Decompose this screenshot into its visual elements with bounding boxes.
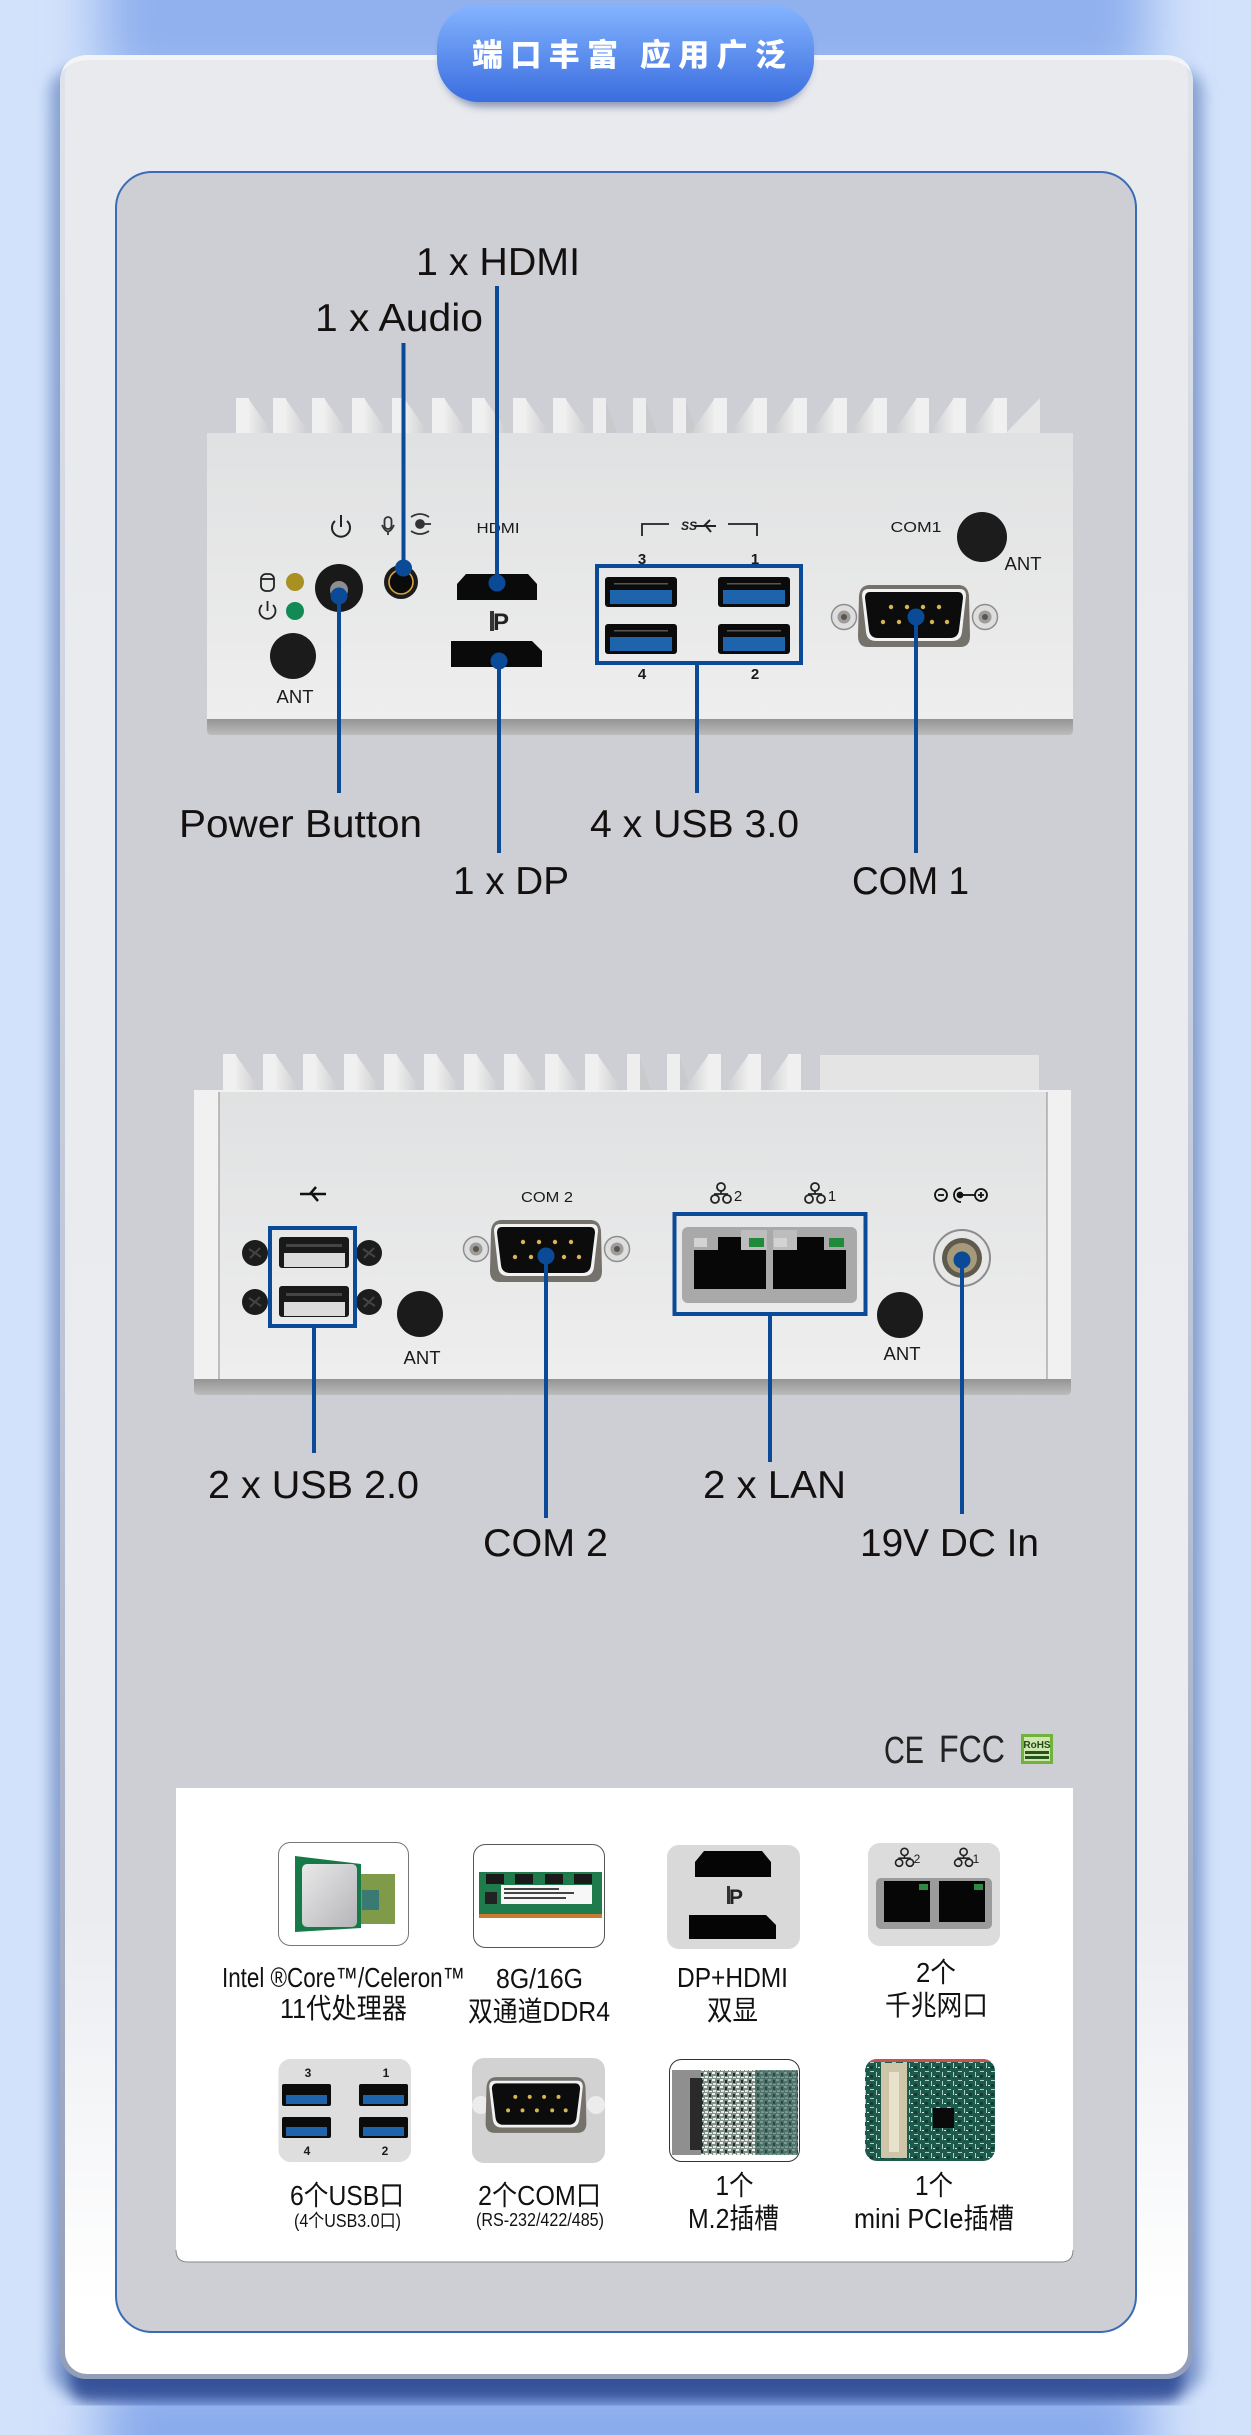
feature: USB thumbnail: 2 (382, 2144, 389, 2158)
USB port numbers (638, 551, 759, 683)
DP logo: P (493, 609, 509, 636)
caption: M.2: M.2插槽 (688, 2203, 779, 2234)
COM2 serial port (464, 1220, 630, 1282)
LAN labels (711, 1183, 836, 1205)
device base (207, 719, 1073, 735)
FCC mark: FCC (939, 1729, 1005, 1771)
RoHS mark: RoHS (1023, 1740, 1051, 1751)
icon: power small (260, 601, 275, 619)
feature: USB thumbnail: 1 (383, 2066, 390, 2080)
caption: mini PCIe: mini PCIe插槽 (854, 2203, 1014, 2234)
device seams (219, 1092, 1047, 1379)
heat sink fins (223, 1054, 801, 1090)
device face (219, 1092, 1047, 1379)
feature: display thumbnail: P (729, 1886, 743, 1909)
device: rear view (194, 1054, 1071, 1395)
panel: feature summary (176, 1788, 1073, 2262)
caption: CPU: Intel ®Core™/Celeron™ (222, 1962, 465, 1993)
caption: display: 双显 (707, 1995, 758, 2026)
caption: LAN (885, 1957, 988, 2021)
caption: COM: 2个COM口 (478, 2180, 601, 2211)
USB highlight box (270, 1228, 355, 1326)
caption: M.2 (688, 2170, 779, 2234)
label: 1 x HDMI: 1 x HDMI (416, 241, 580, 284)
feature: display thumbnail (667, 1845, 800, 1949)
label: COM 1: COM 1 (852, 860, 969, 903)
title: 端口丰富 应用广泛 (472, 30, 786, 75)
device body (207, 433, 1073, 719)
feature: CPU thumbnail (278, 1842, 408, 1946)
device base (194, 1379, 1071, 1395)
LED green (286, 602, 304, 620)
HDMI port (457, 574, 537, 600)
feature: USB thumbnail (278, 2059, 411, 2162)
caption: COM (476, 2180, 604, 2230)
icon: USB SS bracket (642, 519, 757, 536)
caption: display: DP+HDMI (677, 1962, 788, 1993)
DP port (451, 641, 542, 667)
caption: M.2: 1个 (716, 2170, 754, 2201)
caption: USB (290, 2180, 404, 2231)
USB port numbers: 4 (638, 666, 647, 683)
feature: LAN thumbnail: 2 (914, 1852, 921, 1866)
icon: disk (261, 574, 274, 591)
power symbol (332, 515, 350, 537)
device: front view (207, 398, 1073, 735)
label: COM 2: COM 2 (521, 1189, 573, 1206)
CE mark: CE (884, 1730, 924, 1772)
caption: COM: (RS-232/422/485) (476, 2210, 604, 2230)
caption: USB: 6个USB口 (290, 2180, 404, 2211)
audio jack (384, 565, 418, 599)
caption: memory: 双通道DDR4 (468, 1996, 610, 2027)
caption: memory: 8G/16G (496, 1963, 583, 1994)
COM1 serial port (832, 585, 998, 647)
caption: CPU (222, 1962, 465, 2024)
power button (315, 564, 363, 612)
title pill (437, 5, 814, 107)
label: 1 x DP: 1 x DP (453, 860, 569, 903)
USB highlight box (597, 566, 801, 663)
icon: audio out (411, 514, 431, 534)
caption: CPU: 11代处理器 (280, 1993, 407, 2024)
caption: LAN: 2个 (916, 1957, 956, 1988)
feature: USB thumbnail: 3 (305, 2066, 312, 2080)
LED yellow (286, 573, 304, 591)
rear block (820, 1055, 1039, 1091)
antenna knob left (397, 1291, 443, 1337)
feature: USB thumbnail: 4 (304, 2144, 311, 2158)
feature: M.2 thumbnail (670, 2060, 800, 2162)
label: ANT left: ANT (276, 687, 314, 707)
LAN labels: 2 (734, 1188, 742, 1205)
USB 2.0 ports (242, 1237, 382, 1317)
certification marks (884, 1729, 1053, 1772)
caption: USB: (4个USB3.0口) (294, 2211, 401, 2231)
device body (194, 1090, 1071, 1379)
USB port numbers: 3 (638, 551, 646, 568)
callouts: rear view connectors (312, 1248, 970, 1518)
icon: USB trident (300, 1187, 326, 1201)
feature: LAN thumbnail: 1 (973, 1852, 980, 1866)
USB port numbers: 2 (751, 666, 759, 683)
panel: grey ports panel (116, 172, 1136, 2332)
feature: memory thumbnail (474, 1844, 604, 1948)
icon: USB SS bracket: SS (681, 519, 697, 533)
label: COM 2: COM 2 (483, 1522, 608, 1565)
antenna knob right (877, 1292, 923, 1338)
feature: LAN thumbnail (868, 1843, 1000, 1946)
LAN highlight box (674, 1214, 866, 1314)
feature: mini PCIe thumbnail (865, 2059, 995, 2161)
LAN labels: 1 (828, 1188, 836, 1205)
label: 2 x USB 2.0: 2 x USB 2.0 (208, 1464, 419, 1507)
label: ANT right: ANT (884, 1344, 921, 1364)
DC power jack (934, 1230, 990, 1286)
caption: mini PCIe: 1个 (915, 2170, 953, 2201)
icon: DC polarity (935, 1188, 987, 1202)
label: ANT left: ANT (404, 1348, 441, 1368)
label: HDMI: HDMI (476, 520, 520, 537)
label: 19V DC In: 19V DC In (860, 1522, 1039, 1565)
USB 3.0 ports (605, 577, 790, 654)
heat sink fins (236, 398, 1040, 434)
USB port numbers: 1 (751, 551, 759, 568)
callouts: front view connectors (330, 286, 924, 853)
RoHS mark (1021, 1734, 1053, 1764)
caption: LAN: 千兆网口 (885, 1990, 988, 2021)
antenna knob right (957, 512, 1007, 562)
caption: memory (468, 1963, 610, 2027)
label: 1 x Audio: 1 x Audio (315, 297, 483, 340)
label: COM1: COM1 (890, 519, 942, 536)
antenna knob left (270, 633, 316, 679)
feature: COM thumbnail (472, 2058, 605, 2163)
label: ANT: ANT (1004, 554, 1042, 574)
label: Power Button: Power Button (179, 803, 422, 846)
icon: microphone (382, 517, 394, 535)
caption: mini PCIe (854, 2170, 1014, 2234)
label: 2 x LAN: 2 x LAN (703, 1464, 846, 1507)
label: 4 x USB 3.0: 4 x USB 3.0 (590, 803, 799, 846)
caption: display (677, 1962, 788, 2026)
LAN ports (682, 1227, 857, 1303)
